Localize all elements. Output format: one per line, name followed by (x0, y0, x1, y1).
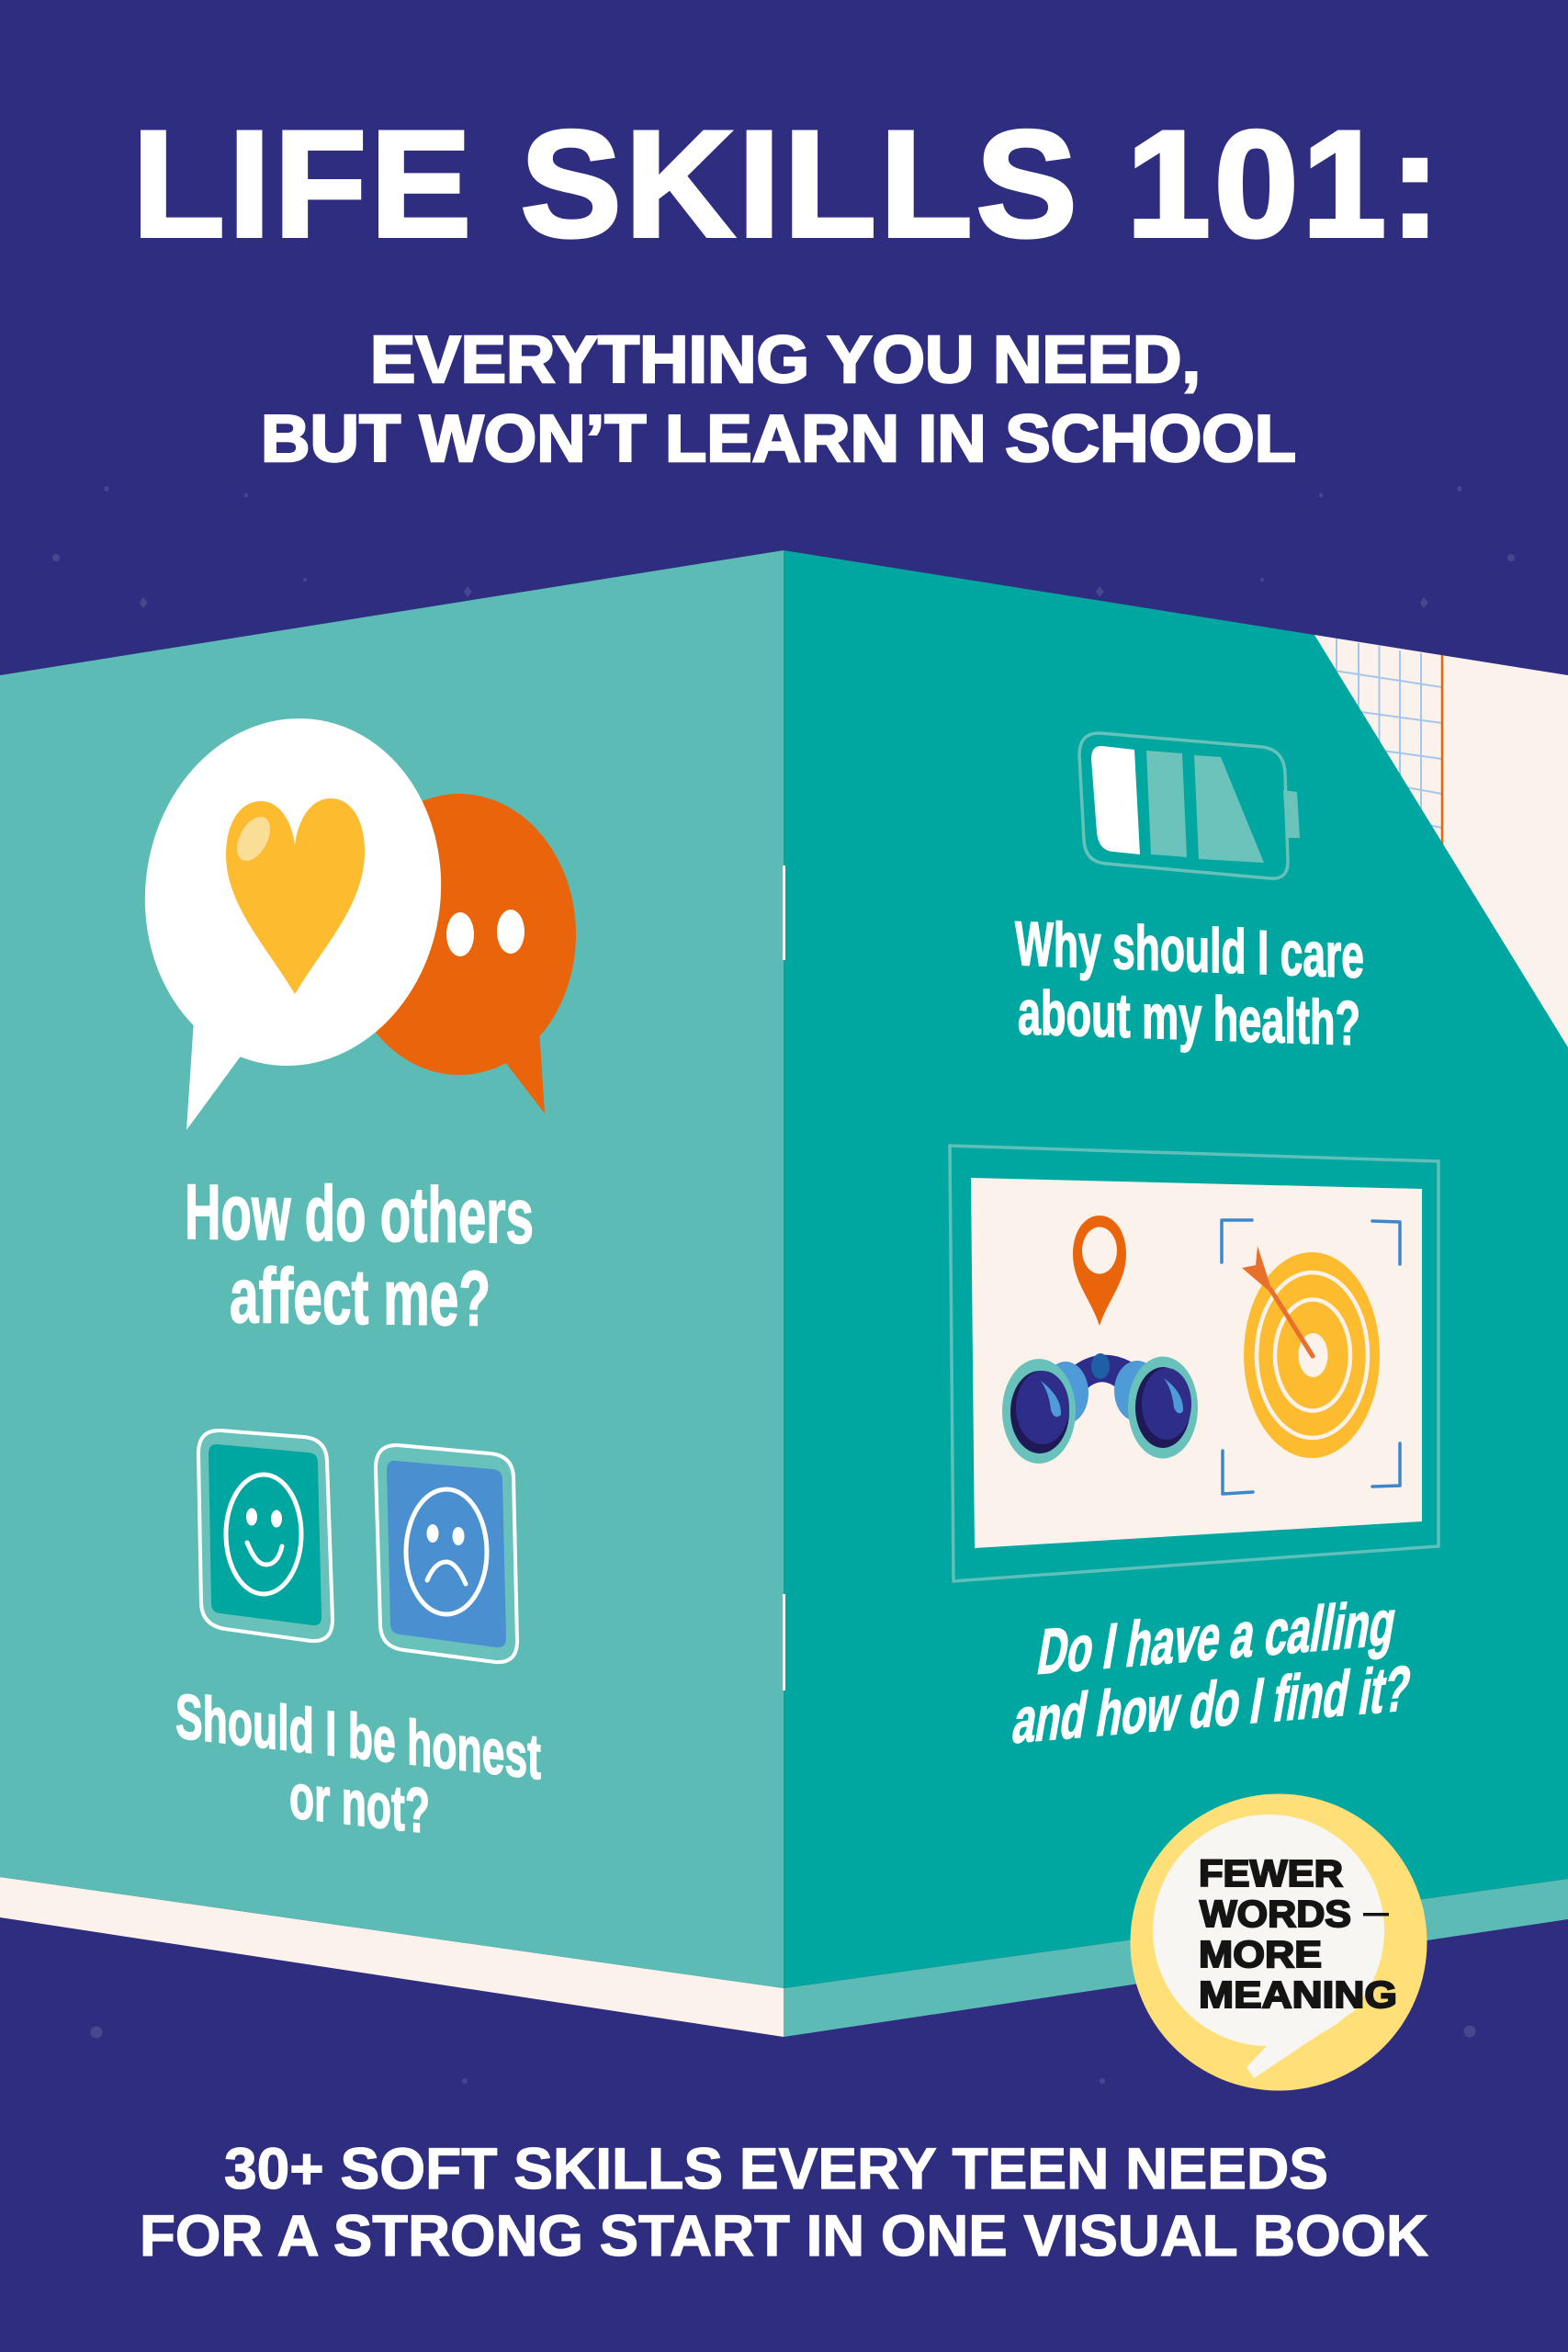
em dash (1363, 1913, 1389, 1917)
focus brackets (1222, 1220, 1400, 1494)
text: why should I care: Why should I care (1015, 909, 1364, 991)
text: should I be honest: Should I be honest (175, 1679, 541, 1792)
text: why should I care (1015, 909, 1364, 1058)
icon: happy card (198, 1430, 333, 1641)
fold tabs (783, 865, 785, 1690)
text: how do others: affect me? (230, 1252, 491, 1343)
icon: speech bubbles with heart (139, 718, 576, 1130)
subtitle: BUT WON’T LEARN IN SCHOOL (261, 402, 1296, 476)
text: do I have a calling (1008, 1586, 1416, 1757)
subtitle: EVERYTHING YOU NEED, (370, 323, 1201, 397)
orange speech bubble (343, 794, 576, 1114)
white speech bubble (139, 718, 447, 1130)
heart (226, 798, 365, 994)
subtitle (261, 323, 1296, 476)
badge text (1199, 1852, 1397, 2016)
badge: fewer words more meaning (1130, 1793, 1427, 2091)
icon: arrow (1242, 1246, 1313, 1356)
panel: calling illustration (950, 1146, 1438, 1581)
icon: binoculars (1002, 1353, 1198, 1464)
panel: right cover face (784, 550, 1568, 2037)
badge text: WORDS (1200, 1893, 1351, 1935)
text: how do others: How do others (185, 1169, 534, 1261)
icon: location pin (1073, 1216, 1126, 1326)
text: how do others (185, 1169, 534, 1343)
background: cream notebook page (1314, 635, 1568, 1148)
panel: left cover face (0, 550, 784, 2037)
text: should I be honest: or not? (289, 1759, 430, 1847)
title: LIFE SKILLS 101: (132, 99, 1440, 268)
speech dots (446, 910, 525, 956)
icon: sad card (376, 1445, 517, 1662)
badge text: MEANING (1199, 1973, 1397, 2016)
badge text: MORE (1199, 1933, 1322, 1975)
bottom tagline (140, 2137, 1428, 2268)
text: why should I care: about my health? (1018, 978, 1360, 1058)
cream card (971, 1178, 1422, 1548)
badge text: FEWER (1199, 1852, 1343, 1894)
text: should I be honest (175, 1679, 541, 1847)
icon: battery (1079, 733, 1300, 878)
bottom tagline: 30+ SOFT SKILLS EVERY TEEN NEEDS (224, 2137, 1328, 2201)
bottom tagline: FOR A STRONG START IN ONE VISUAL BOOK (140, 2204, 1428, 2268)
heart highlight (231, 811, 276, 866)
icon: target (1244, 1252, 1380, 1458)
frame (950, 1146, 1438, 1581)
speech bubble (1153, 1815, 1384, 2078)
